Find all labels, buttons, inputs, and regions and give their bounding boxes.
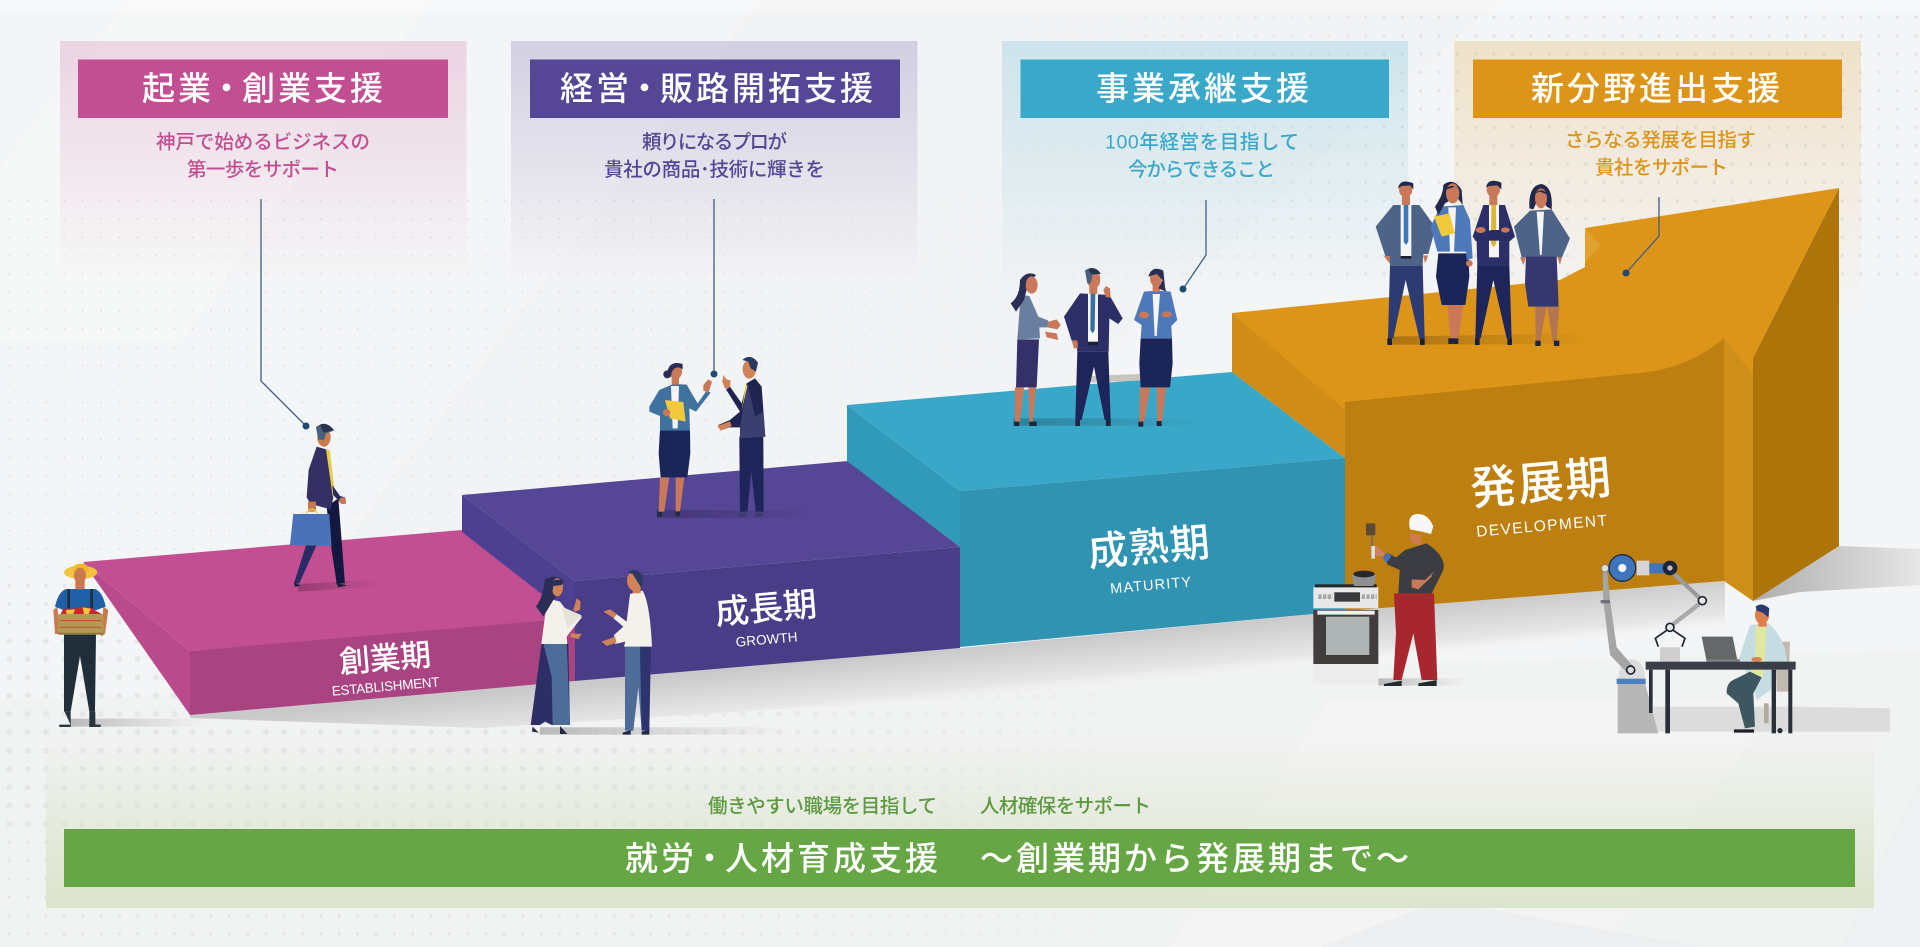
green banner: ～創業期から発展期まで～ bbox=[980, 840, 1412, 877]
step: 創業期 pink bbox=[83, 530, 575, 715]
step: 成長期 purple bbox=[462, 461, 960, 681]
step label: 成長期: 成長期 bbox=[714, 586, 819, 632]
header: 経営・販路開拓支援: 経営・販路開拓支援 bbox=[560, 70, 876, 107]
connector: 新分野 bbox=[1622, 197, 1659, 276]
chef bbox=[1366, 514, 1444, 686]
arrow cast shadow bbox=[1753, 546, 1920, 601]
panel: 起業・創業支援 bbox=[60, 41, 466, 277]
step label: 創業期 bbox=[331, 637, 440, 699]
green captions: 働きやすい職場を目指して bbox=[708, 796, 937, 818]
header: 新分野進出支援 bbox=[1473, 60, 1842, 118]
floor shadow under steps bbox=[190, 581, 1725, 728]
subtitle: 第一歩をサポート bbox=[187, 159, 339, 181]
panel: 経営・販路開拓支援 bbox=[511, 41, 918, 281]
step label: 創業期: ESTABLISHMENT bbox=[331, 674, 440, 699]
panel: 事業承継支援 bbox=[1002, 41, 1408, 301]
subtitle: 神戸で始めるビジネスの bbox=[156, 132, 370, 154]
woman two bbox=[1431, 182, 1473, 344]
figure: farmer bbox=[53, 564, 210, 727]
subtitle: 貴社をサポート bbox=[1595, 157, 1728, 179]
step label: 発展期: DEVELOPMENT bbox=[1476, 512, 1608, 541]
step label: 発展期: 発展期 bbox=[1468, 451, 1613, 515]
man one bbox=[1376, 181, 1434, 345]
step: 発展期 orange arrow bbox=[1232, 188, 1839, 611]
subtitle: さらなる発展を目指す bbox=[1565, 130, 1756, 152]
desk and laptop bbox=[1646, 637, 1796, 733]
green captions bbox=[708, 796, 1151, 818]
header: 経営・販路開拓支援 bbox=[530, 60, 900, 118]
subtitle: 100年経営を目指して bbox=[1105, 132, 1299, 154]
figure: chef with oven bbox=[1313, 514, 1468, 686]
oven bbox=[1313, 571, 1378, 683]
connector: 成長期 bbox=[710, 199, 718, 378]
green banner bbox=[64, 829, 1855, 887]
header: 起業・創業支援 bbox=[78, 60, 448, 118]
subtitle bbox=[1565, 130, 1756, 179]
subtitle: 貴社の商品･技術に輝きを bbox=[604, 159, 825, 181]
man three bbox=[1473, 181, 1515, 345]
header: 事業承継支援 bbox=[1020, 60, 1389, 118]
step label: 成熟期: MATURITY bbox=[1110, 574, 1192, 598]
subtitle bbox=[156, 132, 370, 181]
header: 起業・創業支援: 起業・創業支援 bbox=[142, 70, 386, 107]
green captions: 人材確保をサポート bbox=[980, 796, 1151, 818]
figure: robot arm and engineer bbox=[1601, 555, 1890, 733]
robot arm bbox=[1601, 555, 1706, 733]
subtitle: 頼りになるプロが bbox=[642, 132, 787, 154]
header: 事業承継支援: 事業承継支援 bbox=[1096, 70, 1312, 107]
step label: 成熟期: 成熟期 bbox=[1086, 521, 1212, 575]
figure: team of four bbox=[1376, 181, 1593, 346]
connector: 創業期 bbox=[261, 199, 310, 430]
panel: 就労・人材育成支援 bbox=[46, 736, 1874, 908]
casual pair bbox=[531, 570, 793, 735]
subtitle bbox=[604, 132, 825, 181]
step: 成熟期 teal bbox=[847, 372, 1345, 647]
panel: 新分野進出支援 bbox=[1454, 41, 1861, 311]
figure: businessman with bag bbox=[290, 424, 380, 592]
step label: 成長期: GROWTH bbox=[735, 629, 798, 650]
engineer bbox=[1727, 605, 1790, 733]
figure: business pair bbox=[531, 357, 810, 735]
step label: 創業期: 創業期 bbox=[338, 637, 432, 680]
woman four bbox=[1514, 184, 1570, 346]
subtitle: 今からできること bbox=[1128, 159, 1275, 181]
connector: 成熟期 bbox=[1180, 200, 1206, 292]
green banner: 就労・人材育成支援 bbox=[625, 840, 941, 877]
figure: meeting trio bbox=[1011, 268, 1200, 427]
header: 新分野進出支援: 新分野進出支援 bbox=[1531, 70, 1783, 107]
subtitle bbox=[1105, 132, 1299, 181]
